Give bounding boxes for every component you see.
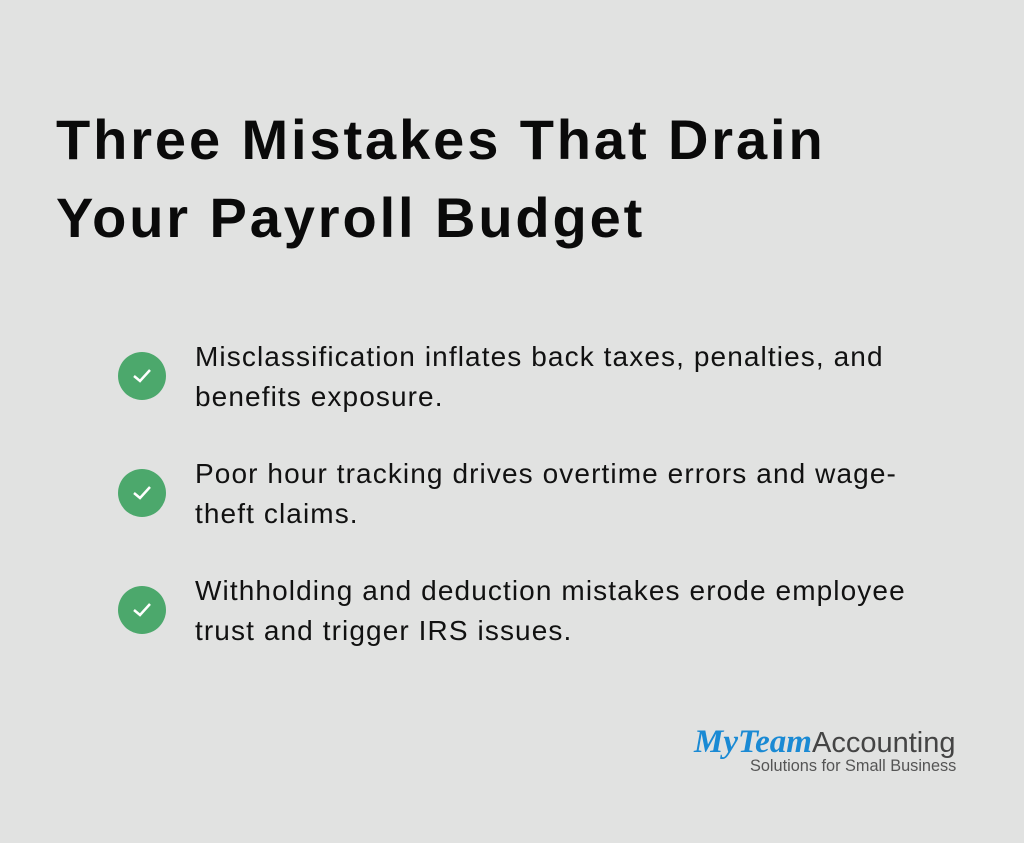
text 3: Withholding and deduction mistakes erode employee (195, 575, 906, 606)
item 3 (118, 575, 906, 646)
logo (694, 724, 956, 775)
text 3: trust and trigger IRS issues. (195, 615, 572, 646)
text 2: Poor hour tracking drives overtime errors and wage- (195, 458, 897, 489)
text 1: Misclassification inflates back taxes, penalties, and (195, 341, 884, 372)
text 1 (195, 341, 884, 412)
logo: MyTeam (694, 724, 812, 760)
icon: check (118, 469, 166, 517)
logo: Accounting (812, 727, 956, 759)
text 1: benefits exposure. (195, 381, 444, 412)
text 2 (195, 458, 897, 529)
item 2 (118, 458, 897, 529)
text 3 (195, 575, 906, 646)
icon: check (118, 352, 166, 400)
title: Three Mistakes That Drain (56, 108, 826, 171)
text 2: theft claims. (195, 498, 359, 529)
item 1 (118, 341, 884, 412)
title: Your Payroll Budget (56, 186, 645, 249)
title (56, 108, 826, 249)
icon: check (118, 586, 166, 634)
logo: Solutions for Small Business (750, 757, 956, 775)
